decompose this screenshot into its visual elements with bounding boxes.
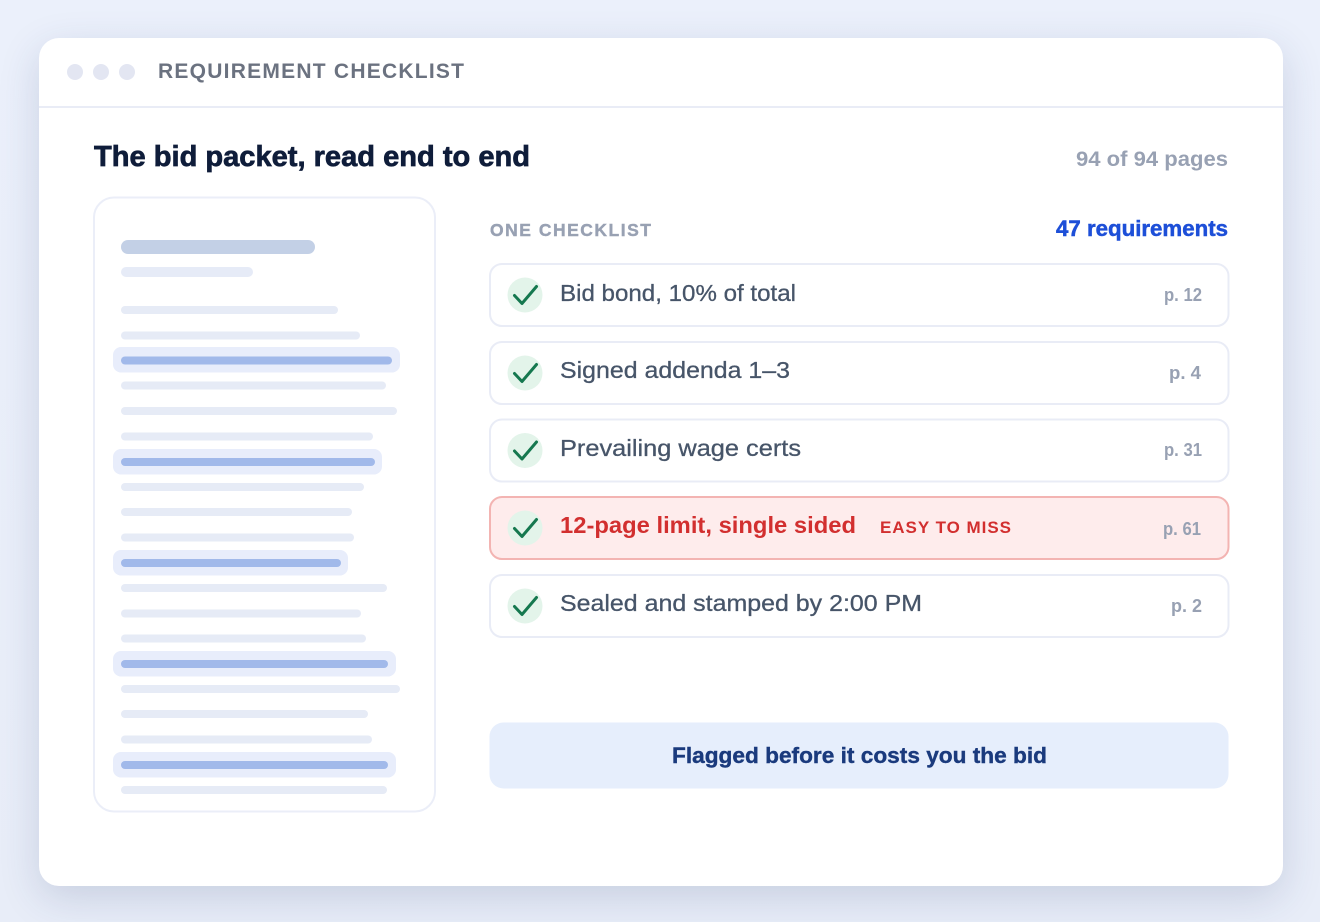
checklist row: page limit, flagged: 12-page limit, single sided (560, 512, 856, 538)
checklist row: sealed and stamped (490, 575, 1228, 637)
checklist row: wage certs: p. 31 (1164, 440, 1202, 460)
checklist row: bid bond: p. 12 (1164, 285, 1202, 305)
heading: The bid packet, read end to end (94, 141, 530, 173)
window title: REQUIREMENT CHECKLIST (158, 60, 464, 83)
checklist row: page limit, flagged: p. 61 (1163, 519, 1201, 539)
checklist label: ONE CHECKLIST (490, 220, 651, 240)
window title bar (39, 60, 1283, 108)
checklist row: bid bond (490, 264, 1228, 326)
checklist row: bid bond: Bid bond, 10% of total (560, 280, 796, 306)
checklist row: page limit, flagged (490, 497, 1228, 559)
highlighted lines (113, 347, 400, 778)
document title bar (121, 240, 315, 254)
checklist row: addenda: p. 4 (1169, 363, 1201, 383)
window control dots (67, 64, 135, 80)
requirement count: 47 requirements (1056, 216, 1228, 241)
checklist row: sealed and stamped: p. 2 (1171, 596, 1202, 616)
checklist row: sealed and stamped: Sealed and stamped by 2:00 PM (560, 590, 922, 616)
callout banner: Flagged before it costs you the bid (672, 743, 1047, 768)
page count: 94 of 94 pages (1076, 148, 1228, 171)
panel: document preview (94, 198, 435, 812)
callout banner (490, 722, 1228, 788)
document text lines (121, 306, 400, 794)
checklist row: wage certs: Prevailing wage certs (560, 435, 801, 461)
easy to miss tag: EASY TO MISS (880, 518, 1011, 537)
checklist row: addenda: Signed addenda 1–3 (560, 357, 790, 383)
checklist row: addenda (490, 342, 1228, 404)
document subtitle bar (121, 267, 253, 277)
checklist row: wage certs (490, 420, 1228, 482)
